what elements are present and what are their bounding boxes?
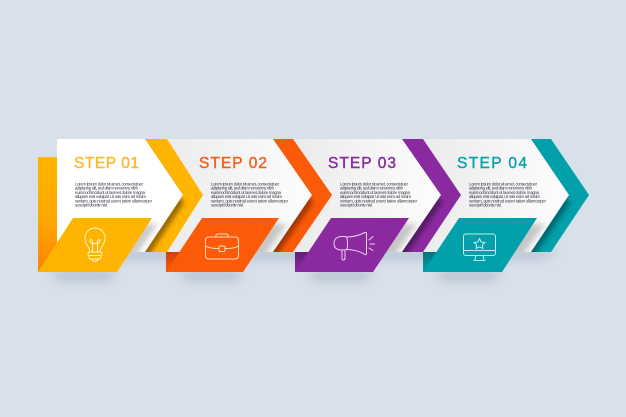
back strip 1 xyxy=(38,157,78,272)
parallelogram shadow 1 xyxy=(130,221,158,252)
text block 1 xyxy=(75,182,153,208)
text block 4: adipiscing elit, sed diam nonummy nibh xyxy=(469,186,533,191)
text block 4: euismod tincidunt ut laoreet dolore magna xyxy=(469,190,540,195)
parallelogram shadow 3 xyxy=(386,221,418,252)
step 4 xyxy=(423,139,589,272)
ground shadow xyxy=(50,250,560,282)
parallelogram 4 xyxy=(423,218,537,272)
text block 2: suscipit lobortis nisl. xyxy=(211,202,244,208)
text block 1: adipiscing elit, sed diam nonummy nibh xyxy=(75,186,139,191)
text block 4: veniam, quis nostrud exerci tation ullamcorper xyxy=(469,198,547,203)
icon: briefcase xyxy=(206,234,238,259)
chevron 1 xyxy=(145,139,203,252)
text block 3: suscipit lobortis nisl. xyxy=(340,202,373,208)
text block 2: euismod tincidunt ut laoreet dolore magna xyxy=(211,190,282,195)
text block 2: aliquam erat volutpat. Ut wisi enim ad minim xyxy=(211,194,282,199)
text block 2: veniam, quis nostrud exerci tation ullamcorper xyxy=(211,198,289,203)
text block 4 xyxy=(469,182,547,208)
back fold 3 xyxy=(295,250,345,272)
step 2 xyxy=(166,139,332,272)
parallelogram shadow 2 xyxy=(256,221,288,252)
step 1 xyxy=(38,139,203,280)
chevron 3 xyxy=(402,139,461,252)
heading 2: STEP 02 xyxy=(199,155,267,172)
chevron 4 xyxy=(531,139,589,252)
heading 3: STEP 03 xyxy=(328,155,396,172)
text block 1: suscipit lobortis nisl. xyxy=(75,202,108,208)
icon: megaphone xyxy=(334,232,374,260)
text block 4: suscipit lobortis nisl. xyxy=(469,202,502,208)
text block 4: Lorem ipsum dolor sit amet, consectetuer xyxy=(469,182,538,186)
parallelogram 3 xyxy=(295,218,409,272)
heading 1: STEP 01 xyxy=(74,155,139,172)
text block 2 xyxy=(211,182,289,208)
parallelogram 2 xyxy=(166,218,279,272)
panel 1 xyxy=(57,139,183,252)
icon: monitor with star xyxy=(464,234,496,260)
back fold 4 xyxy=(423,250,473,272)
text block 3: euismod tincidunt ut laoreet dolore magna xyxy=(340,190,411,195)
text block 3: aliquam erat volutpat. Ut wisi enim ad minim xyxy=(340,194,411,199)
text block 3 xyxy=(340,182,418,208)
back fold 2 xyxy=(166,250,216,272)
panel 2 xyxy=(140,139,312,252)
text block 3: adipiscing elit, sed diam nonummy nibh xyxy=(340,186,404,191)
text block 4: aliquam erat volutpat. Ut wisi enim ad minim xyxy=(469,194,540,199)
text block 2: Lorem ipsum dolor sit amet, consectetuer xyxy=(211,182,280,186)
text block 1: aliquam erat volutpat. Ut wisi enim ad minim xyxy=(75,194,146,199)
panel 4 xyxy=(400,139,569,252)
text block 3: veniam, quis nostrud exerci tation ullamcorper xyxy=(340,198,418,203)
panel 3 xyxy=(270,139,441,252)
icon: light bulb xyxy=(85,228,105,261)
parallelogram 1 xyxy=(38,218,152,272)
text block 1: veniam, quis nostrud exerci tation ullamcorper xyxy=(75,198,153,203)
text block 2: adipiscing elit, sed diam nonummy nibh xyxy=(211,186,275,191)
text block 3: Lorem ipsum dolor sit amet, consectetuer xyxy=(340,182,409,186)
parallelogram shadow 4 xyxy=(515,221,546,252)
text block 1: Lorem ipsum dolor sit amet, consectetuer xyxy=(75,182,144,186)
step 3 xyxy=(293,139,461,272)
chevron 2 xyxy=(273,139,332,252)
text block 1: euismod tincidunt ut laoreet dolore magna xyxy=(75,190,146,195)
heading 4: STEP 04 xyxy=(457,155,527,172)
